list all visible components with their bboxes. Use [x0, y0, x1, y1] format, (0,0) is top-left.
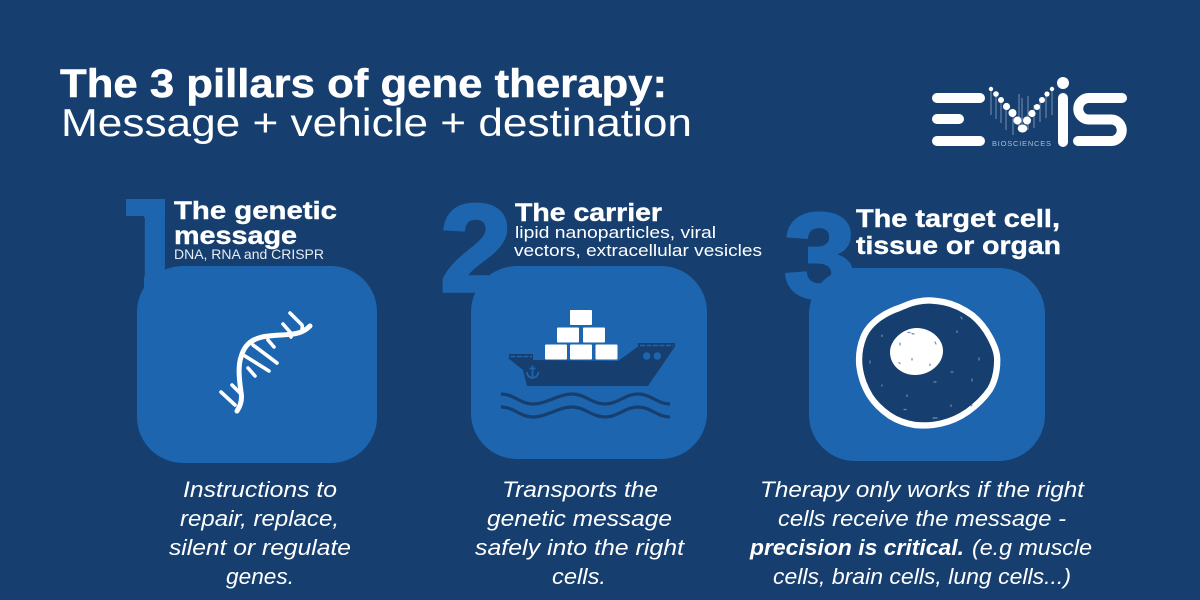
description: cells receive the message - — [778, 506, 1066, 531]
title: Message + vehicle + destination — [61, 102, 692, 145]
numeral 3: 3 — [784, 189, 856, 323]
infographic canvas — [60, 68, 1127, 588]
description: repair, replace, — [180, 506, 339, 531]
subheading: carrier types — [514, 223, 762, 260]
panel: target — [749, 205, 1092, 589]
card: target — [809, 268, 1045, 461]
panel: genetic message — [137, 197, 377, 589]
description: silent or regulate — [169, 535, 351, 560]
panel: carrier — [471, 199, 762, 589]
description — [169, 477, 351, 589]
card: carrier — [471, 266, 707, 459]
numeral 1: 1 — [115, 172, 188, 319]
subheading: carrier types: lipid nanoparticles, viral — [515, 223, 716, 242]
heading: the genetic message: The genetic — [174, 197, 337, 225]
heading: the carrier: The carrier — [515, 199, 662, 227]
heading: the target cell, tissue or organ: The target cell, — [856, 205, 1060, 233]
description: precision is critical. — [749, 535, 964, 560]
description: Therapy only works if the right — [760, 477, 1085, 502]
heading: the target cell, tissue or organ: tissue or organ — [856, 232, 1061, 260]
logo: EVIS Biosciences: BIOSCIENCES — [992, 139, 1051, 148]
description: genes. — [226, 564, 294, 589]
description — [475, 477, 685, 589]
card: genetic message — [137, 266, 377, 463]
description: Instructions to — [183, 477, 337, 502]
numeral 2: 2 — [440, 180, 512, 318]
description: (e.g muscle — [972, 535, 1092, 560]
description: cells, brain cells, lung cells...) — [773, 564, 1071, 589]
subheading: DNA, RNA and CRISPR: DNA, RNA and CRISPR — [174, 246, 324, 262]
description: genetic message — [487, 506, 672, 531]
title: The 3 pillars of gene therapy: — [60, 62, 667, 106]
title — [60, 62, 692, 145]
icon: cell with nucleus — [859, 300, 997, 425]
description: Transports the — [502, 477, 658, 502]
heading: the genetic message — [174, 197, 337, 250]
description: safely into the right — [475, 535, 685, 560]
heading: the target cell, tissue or organ — [856, 205, 1061, 260]
subheading: carrier types: vectors, extracellular vesicles — [514, 241, 762, 260]
heading: the genetic message: message — [174, 222, 297, 250]
numeral 1 — [126, 199, 165, 288]
description — [749, 477, 1092, 589]
logo: EVIS Biosciences — [932, 77, 1122, 148]
description: cells. — [552, 564, 606, 589]
icon: cargo ship — [501, 310, 675, 417]
icon: DNA helix — [221, 313, 310, 411]
